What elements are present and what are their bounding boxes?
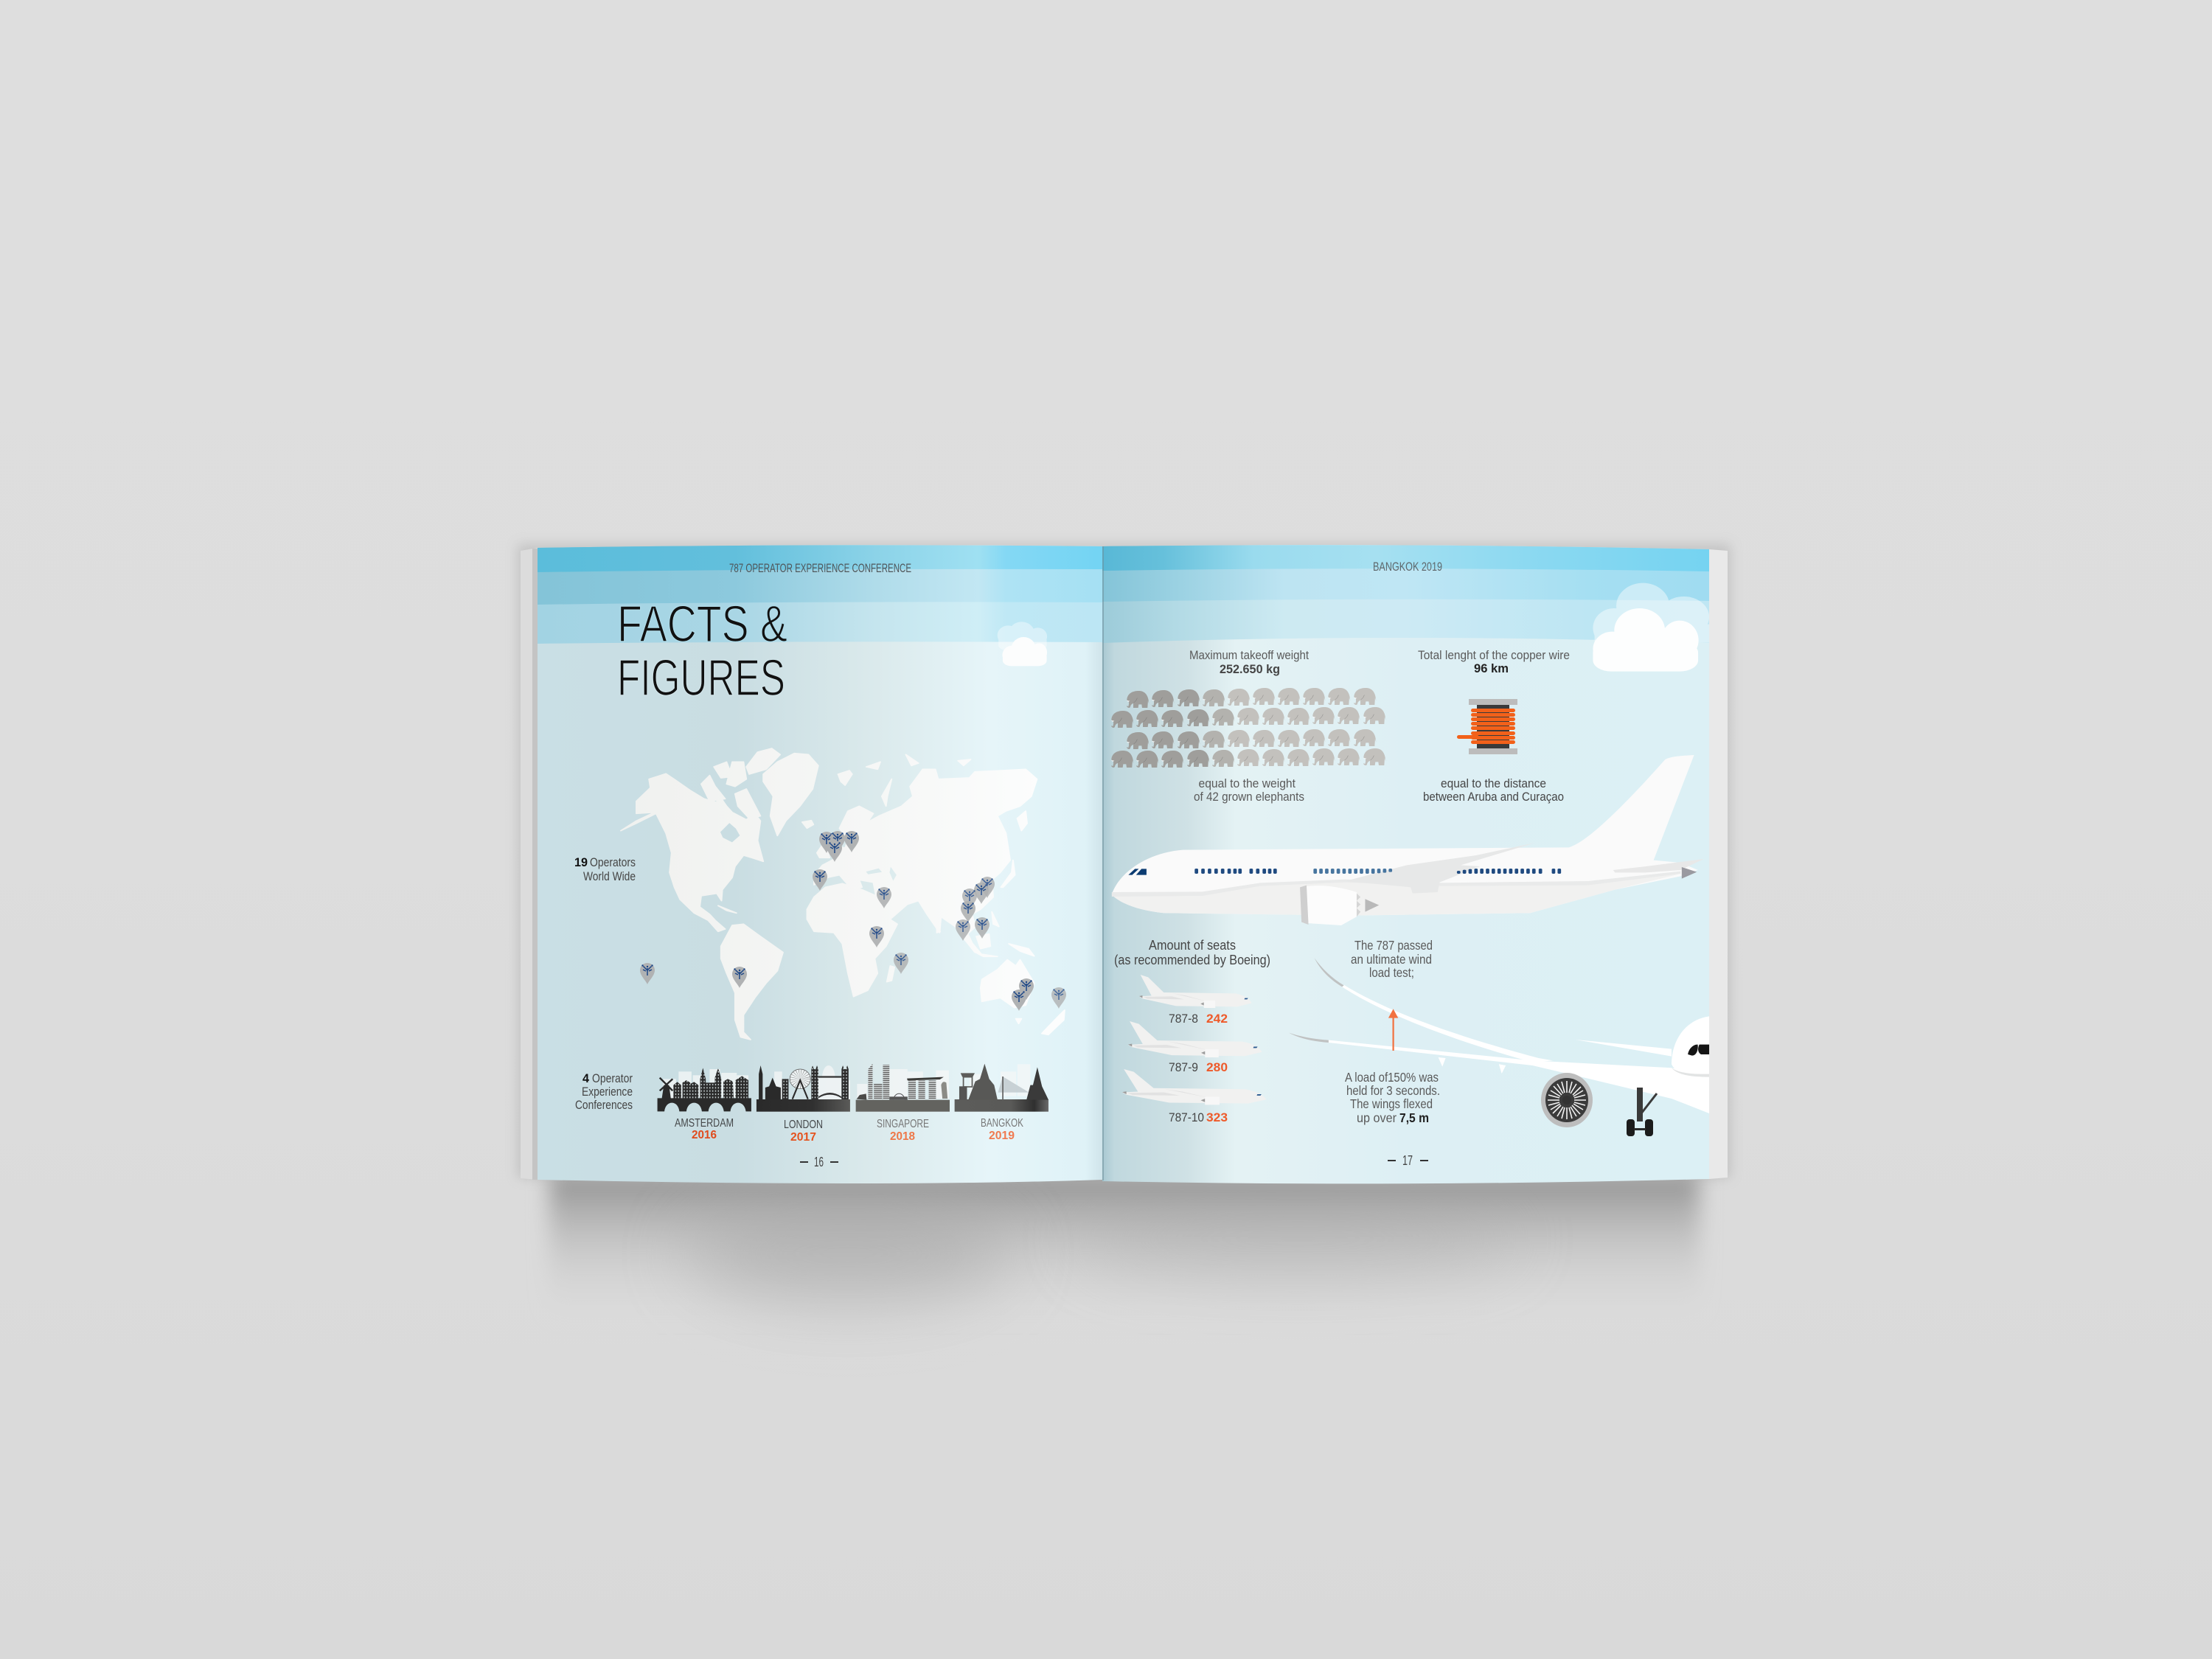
panel: left page — [538, 545, 1102, 1183]
operators label — [574, 855, 636, 883]
caption: distance: equal to the distance — [1441, 776, 1546, 790]
stat: maximum takeoff weight: 252.650 kg — [1220, 662, 1280, 676]
city labels: 2016 — [692, 1129, 717, 1141]
operators label: World Wide — [583, 869, 636, 883]
wind test text bottom: A load of150% was — [1345, 1070, 1439, 1085]
seat row: 787-8: 787-8 — [1169, 1012, 1198, 1026]
conferences label: Operator — [592, 1071, 633, 1085]
conferences label — [575, 1071, 633, 1112]
world map — [621, 748, 1065, 1040]
wind test text top: load test; — [1369, 965, 1414, 980]
icon: jet engine — [1541, 1073, 1593, 1127]
panel: right page — [1102, 545, 1709, 1183]
conferences label: Experience — [582, 1085, 633, 1099]
running header right: BANGKOK 2019 — [1373, 560, 1442, 574]
city labels: 2018 — [890, 1130, 915, 1143]
page number 17: 17 — [1402, 1153, 1413, 1168]
seat row: 787-10 — [1122, 1069, 1266, 1124]
icon: big cloud — [1593, 583, 1709, 672]
city labels: 2019 — [989, 1130, 1015, 1142]
wind test text top: an ultimate wind — [1351, 952, 1432, 967]
spine shadow — [1102, 546, 1104, 1180]
city labels: SINGAPORE — [877, 1118, 929, 1130]
book drop shadow — [518, 544, 1731, 1320]
seats heading: Amount of seats — [1149, 938, 1236, 953]
seat row: 787-10: 787-10 — [1169, 1110, 1204, 1124]
caption: distance — [1423, 776, 1564, 804]
conferences label: 4 — [582, 1071, 590, 1085]
seats heading: (as recommended by Boeing) — [1114, 953, 1270, 967]
seat row: 787-9: 787-9 — [1169, 1060, 1198, 1074]
illustration: wing flex front view — [1289, 958, 1709, 1113]
wind test text bottom: up over — [1357, 1110, 1397, 1125]
pictogram: 42 elephants — [1111, 688, 1385, 768]
map pins: 19 operators — [640, 831, 1066, 1011]
seat row: 787-9: 280 — [1206, 1060, 1228, 1074]
icon: copper wire spool — [1457, 699, 1517, 754]
wind test text bottom — [1345, 1070, 1440, 1125]
sky band 1 left — [538, 545, 1102, 572]
caption: distance: between Aruba and Curaçao — [1423, 790, 1564, 804]
fuselage windows — [1194, 869, 1561, 874]
seat row: 787-8 — [1139, 975, 1252, 1026]
sky band 3 left — [538, 545, 1102, 644]
page number 16 — [800, 1155, 838, 1169]
running header left: 787 OPERATOR EXPERIENCE CONFERENCE — [729, 562, 911, 575]
wind test text bottom: 7,5 m — [1399, 1110, 1429, 1125]
wind test text top: The 787 passed — [1354, 938, 1433, 953]
stat: maximum takeoff weight — [1189, 648, 1309, 676]
operators label: 19 — [574, 855, 588, 869]
city labels: AMSTERDAM — [675, 1117, 734, 1130]
seat row: 787-9 — [1128, 1021, 1262, 1074]
sky band 1 right — [1102, 545, 1709, 571]
city labels — [675, 1117, 1023, 1144]
skyline: Singapore — [856, 1064, 950, 1112]
seats heading — [1114, 938, 1270, 967]
icon: small cloud — [998, 622, 1047, 666]
caption: elephants: equal to the weight — [1199, 776, 1295, 790]
title: FACTS & — [617, 595, 787, 653]
skyline: London — [757, 1065, 850, 1112]
stat: maximum takeoff weight: Maximum takeoff weight — [1189, 648, 1309, 662]
book cover edges — [521, 548, 1728, 1180]
city labels: BANGKOK — [981, 1117, 1023, 1130]
page number 17 — [1388, 1153, 1428, 1168]
page background left — [538, 545, 1102, 1183]
arrow: wing deflection — [1388, 1009, 1398, 1051]
icon: landing gear — [1627, 1088, 1657, 1136]
skyline: Amsterdam — [658, 1068, 751, 1111]
sky band 2 left — [538, 545, 1102, 605]
page number 16: 16 — [814, 1155, 824, 1169]
stat: copper wire length: 96 km — [1474, 661, 1509, 675]
city labels: 2017 — [790, 1131, 816, 1144]
skyline: Bangkok — [955, 1064, 1048, 1112]
title — [617, 595, 787, 706]
caption: elephants — [1194, 776, 1304, 804]
wind test text bottom: The wings flexed — [1350, 1096, 1433, 1111]
wind test text top — [1351, 938, 1433, 980]
wind test text bottom: held for 3 seconds. — [1346, 1083, 1440, 1098]
caption: elephants: of 42 grown elephants — [1194, 790, 1304, 804]
conferences label: Conferences — [575, 1098, 633, 1112]
city labels: LONDON — [784, 1119, 823, 1131]
seat row: 787-8: 242 — [1206, 1012, 1228, 1026]
illustration: 787 airliner side view — [1112, 755, 1704, 925]
operators label: Operators — [590, 855, 636, 869]
stat: copper wire length — [1418, 648, 1570, 675]
sky band 3 right — [1102, 545, 1709, 643]
stat: copper wire length: Total lenght of the copper wire — [1418, 648, 1570, 662]
seat row: 787-10: 323 — [1206, 1110, 1228, 1124]
page background right — [1102, 545, 1709, 1183]
sky band 2 right — [1102, 545, 1709, 602]
title: FIGURES — [617, 649, 785, 706]
